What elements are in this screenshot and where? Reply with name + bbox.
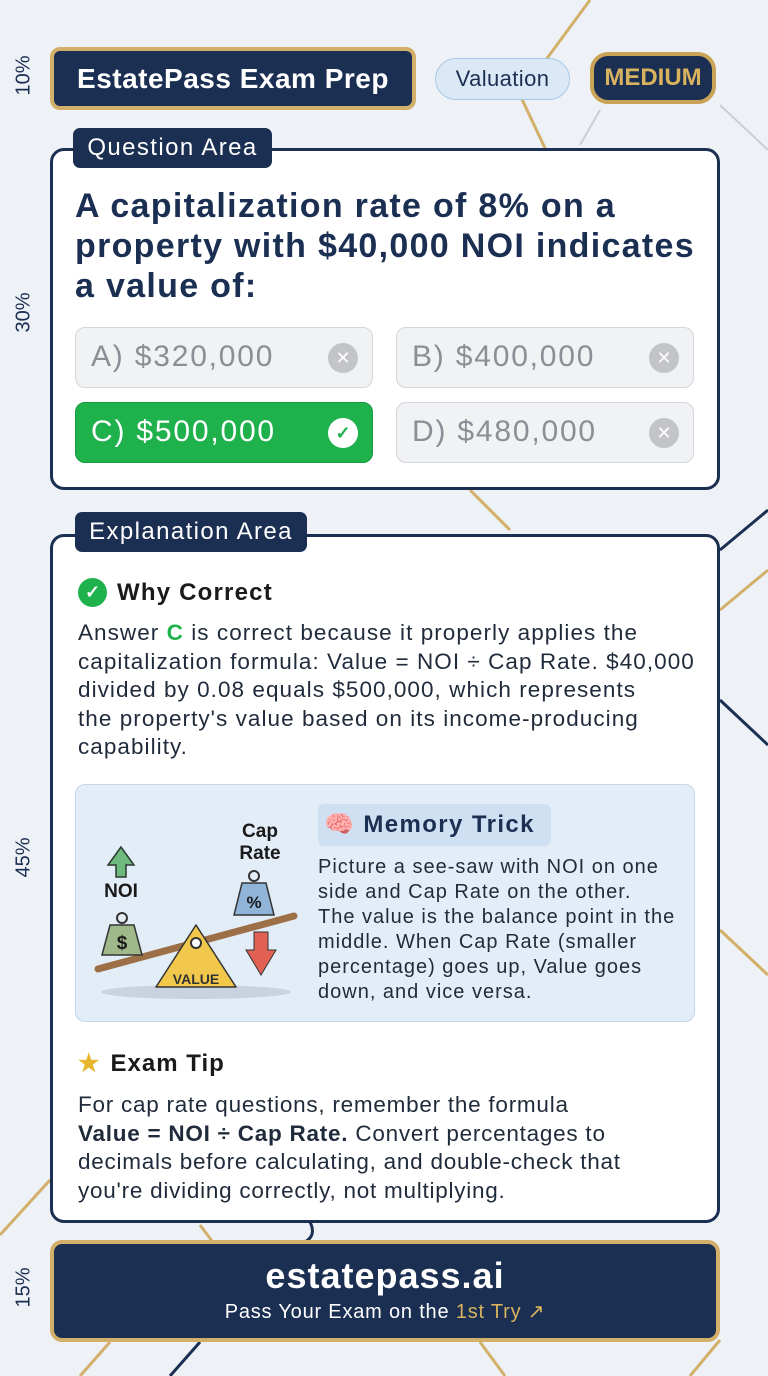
why correct text: the property's value based on its income-producing — [78, 706, 639, 730]
category pill: Valuation — [456, 66, 549, 91]
why correct heading: Why Correct — [117, 579, 273, 606]
why correct heading: ✓ — [85, 582, 100, 602]
memory trick text: Picture a see-saw with NOI on one — [318, 856, 659, 878]
memory trick text: The value is the balance point in the — [318, 906, 675, 928]
memory trick box — [75, 784, 695, 1022]
see-saw illustration: NOI — [104, 881, 138, 902]
option A: ✕ — [335, 348, 351, 368]
difficulty badge — [590, 52, 716, 104]
option C correct: ✓ — [335, 423, 351, 443]
category pill — [435, 58, 570, 100]
option C correct — [75, 402, 373, 463]
exam tip text: For cap rate questions, remember the formula — [78, 1092, 569, 1117]
option B: ✕ — [656, 348, 672, 368]
header title — [50, 47, 416, 110]
question text: property with $40,000 NOI indicates — [75, 227, 695, 265]
why correct text: capitalization formula: Value = NOI ÷ Cap Rate. $40,000 — [78, 648, 695, 674]
memory trick heading: 🧠 Memory Trick — [324, 811, 535, 838]
option D — [396, 402, 694, 463]
memory trick text — [318, 856, 675, 1003]
exam tip text: decimals before calculating, and double-check that — [78, 1149, 621, 1174]
tab: question area — [73, 128, 272, 168]
question text: a value of: — [75, 267, 257, 305]
option D: ✕ — [656, 423, 672, 443]
question text — [75, 187, 695, 305]
option A — [75, 327, 373, 388]
footer — [50, 1240, 720, 1342]
panel: explanation — [50, 534, 720, 1223]
why correct text: Answer C is correct because it properly applies the — [78, 620, 638, 645]
option B — [396, 327, 694, 388]
panel: question — [50, 148, 720, 490]
exam tip heading: ★ Exam Tip — [78, 1050, 225, 1077]
label: 30%: 30% — [12, 292, 34, 332]
label: 45%: 45% — [12, 837, 34, 878]
difficulty badge: MEDIUM — [604, 64, 702, 91]
see-saw illustration: $ — [117, 933, 128, 954]
see-saw illustration: VALUE — [173, 971, 219, 987]
tab: question area: Question Area — [87, 134, 258, 161]
footer tagline: Pass Your Exam on the 1st Try ↗ — [225, 1301, 545, 1323]
exam tip text: you're dividing correctly, not multiplying. — [78, 1178, 506, 1202]
why correct text: divided by 0.08 equals $500,000, which represents — [78, 677, 636, 702]
exam tip text — [78, 1092, 621, 1202]
memory trick heading — [318, 804, 551, 846]
exam tip text: Value = NOI ÷ Cap Rate. Convert percentages to — [78, 1120, 606, 1146]
option D: D) $480,000 — [412, 415, 597, 448]
option A: A) $320,000 — [91, 340, 274, 373]
label: 10%: 10% — [12, 55, 34, 96]
memory trick text: side and Cap Rate on the other. — [318, 881, 631, 903]
tab: explanation area — [75, 512, 307, 552]
see-saw illustration: Rate — [239, 843, 281, 864]
memory trick text: middle. When Cap Rate (smaller — [318, 931, 637, 953]
option C correct: C) $500,000 — [91, 415, 276, 448]
option B: B) $400,000 — [412, 340, 595, 373]
label: 15%: 15% — [12, 1267, 34, 1308]
footer brand: estatepass.ai — [265, 1255, 505, 1296]
memory trick text: percentage) goes up, Value goes — [318, 956, 642, 978]
see-saw illustration: Cap — [242, 821, 278, 842]
memory trick text: down, and vice versa. — [318, 981, 532, 1003]
see-saw illustration — [94, 821, 298, 999]
header title: EstatePass Exam Prep — [77, 63, 389, 94]
why correct text: capability. — [78, 734, 188, 759]
question text: A capitalization rate of 8% on a — [75, 187, 616, 225]
see-saw illustration: % — [246, 893, 262, 912]
why correct text — [78, 620, 695, 759]
tab: explanation area: Explanation Area — [89, 518, 293, 545]
